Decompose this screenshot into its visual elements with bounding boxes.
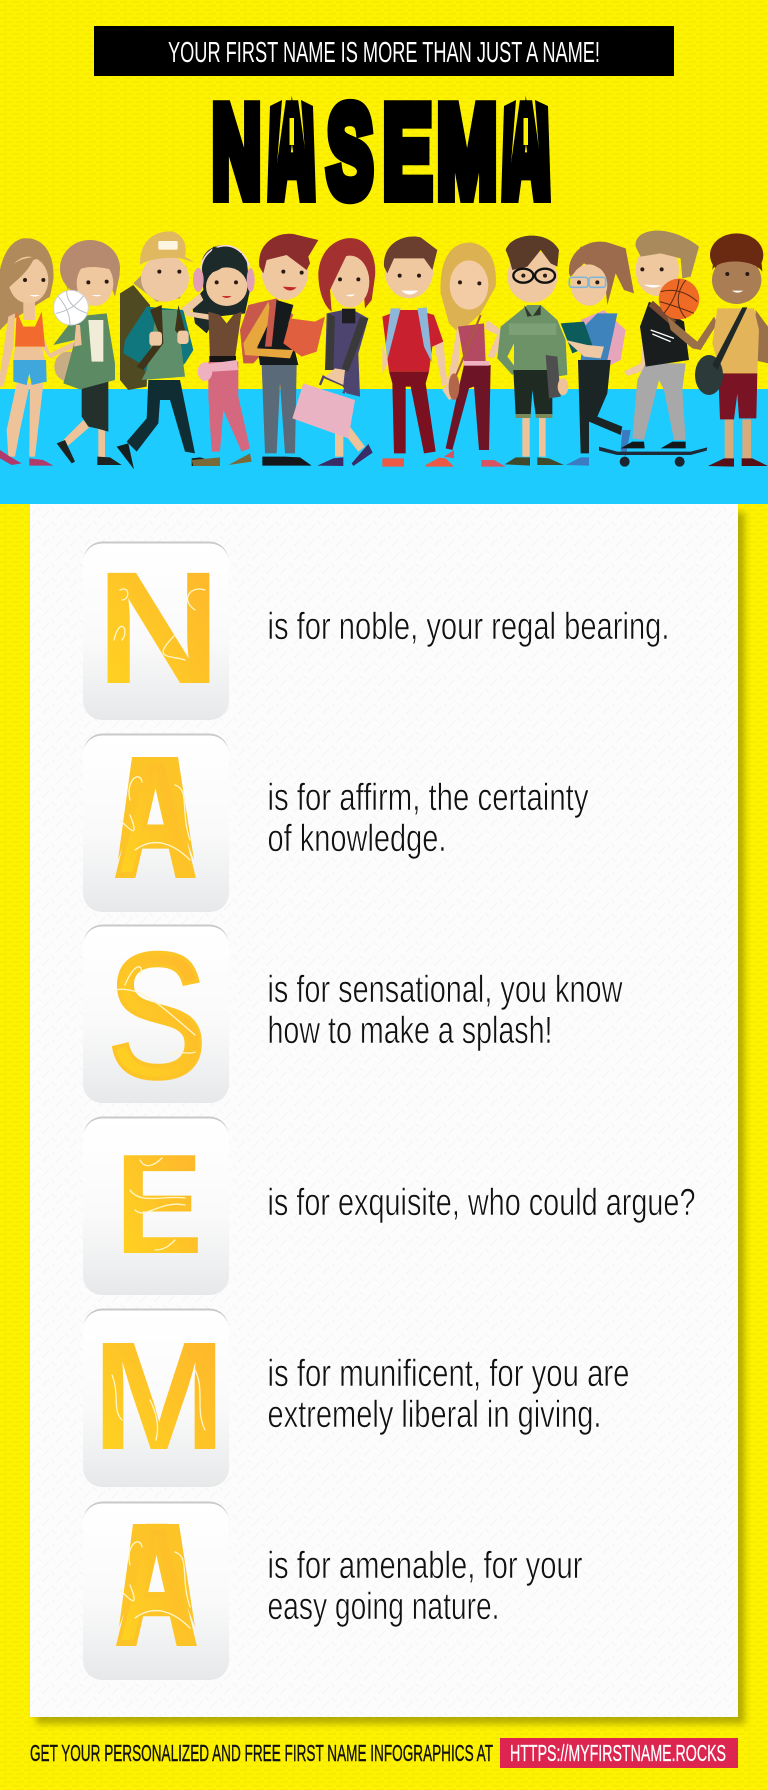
text A	[268, 777, 588, 860]
tile A	[83, 734, 229, 912]
text A: easy going nature.	[268, 1586, 500, 1628]
person: girl with pink bag	[292, 238, 375, 466]
text A: is for amenable, for your	[268, 1545, 583, 1587]
text A	[268, 1545, 583, 1628]
basketball	[659, 279, 699, 319]
title: name: A	[274, 80, 310, 224]
title: name: N	[212, 80, 261, 224]
text S	[268, 969, 623, 1052]
text S: how to make a splash!	[268, 1010, 552, 1052]
row: letter S	[83, 916, 623, 1115]
row: letter N	[83, 538, 670, 720]
row: letter E	[83, 1116, 696, 1295]
text M: extremely liberal in giving.	[268, 1394, 602, 1436]
white panel shadow	[36, 512, 745, 1724]
person: blonde girl	[441, 243, 506, 467]
text M: is for munificent, for you are	[268, 1353, 630, 1395]
person: girl with tablet	[561, 242, 634, 466]
tile E	[83, 1116, 229, 1295]
person: girl in orange top	[0, 238, 80, 466]
infographic page: A	[508, 80, 544, 224]
tile A	[83, 1502, 229, 1680]
person: girl with headphones	[182, 245, 255, 466]
person: guy with glasses	[497, 236, 568, 466]
person: guy reading a book	[240, 234, 325, 466]
person: girl with volleyball	[53, 240, 122, 465]
title: name: S	[327, 80, 373, 224]
title: name: M	[437, 80, 497, 224]
row: letter M	[83, 1308, 630, 1487]
left half of crowd	[0, 231, 375, 469]
person: guy in red shirt	[382, 236, 454, 467]
letter S: S	[107, 916, 207, 1115]
letter N: N	[96, 538, 221, 717]
text M	[268, 1353, 630, 1436]
tile N	[83, 542, 229, 720]
text A: is for affirm, the certainty	[268, 777, 588, 819]
illustration: group of young people	[0, 231, 768, 469]
title: name	[212, 80, 551, 224]
person: hiker with cap and backpack	[117, 231, 220, 469]
text A: of knowledge.	[268, 818, 446, 860]
letter M: M	[92, 1310, 226, 1482]
tagline banner	[94, 26, 674, 76]
tile M	[83, 1308, 229, 1487]
person: guy in tank top	[667, 233, 768, 467]
right half of crowd	[382, 231, 768, 467]
row: letter A	[83, 725, 588, 912]
letter E: E	[115, 1125, 203, 1284]
title: name: E	[383, 80, 432, 224]
letter A	[115, 725, 196, 911]
letter A: A	[115, 725, 196, 911]
blue floor band	[0, 389, 768, 504]
panel: letter meanings	[30, 504, 738, 1717]
person: skateboarder with basketball	[599, 231, 707, 467]
letter A	[116, 1490, 197, 1679]
text S: is for sensational, you know	[268, 969, 623, 1011]
row: letter A	[83, 1490, 583, 1680]
tile S	[83, 924, 229, 1103]
letter A: A	[116, 1490, 197, 1679]
